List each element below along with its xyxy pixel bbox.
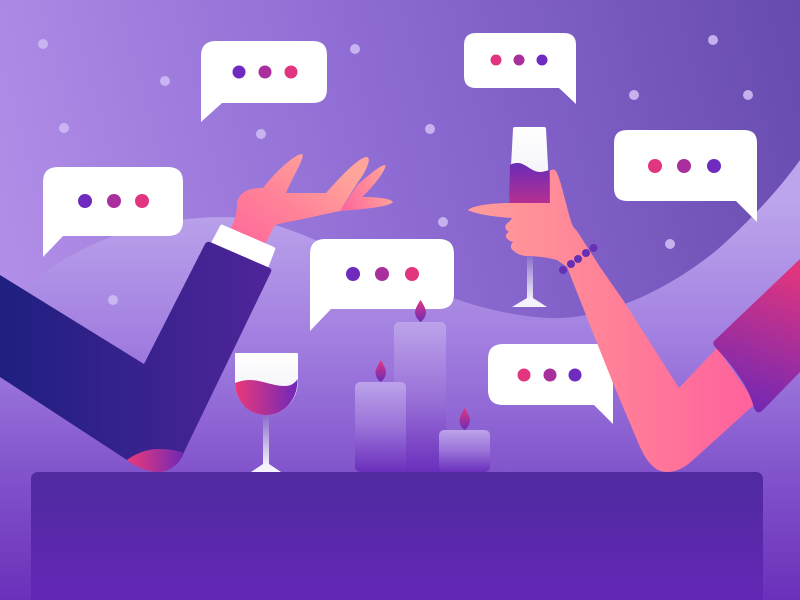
champagne flute (509, 127, 550, 307)
speech bubble: right (614, 130, 757, 222)
background: lower wave (0, 160, 800, 600)
snow dots (38, 35, 753, 305)
arm shape with hand (468, 170, 756, 472)
speech bubble: left (43, 167, 183, 257)
candle: left (355, 360, 406, 472)
elbow lining (127, 449, 184, 472)
sleeve (713, 259, 800, 412)
bracelet (559, 244, 598, 274)
sleeve: suit (0, 242, 271, 471)
candle: short (439, 408, 490, 472)
arm: woman (468, 170, 800, 472)
candle: tall (394, 300, 446, 472)
table (31, 472, 763, 600)
arm: man in suit (0, 154, 393, 472)
speech bubble: top center (464, 33, 576, 104)
speech bubble: center (310, 239, 454, 331)
speech bubble: top left (201, 41, 327, 122)
hand: man (231, 154, 393, 250)
wine glass: table (235, 353, 298, 472)
speech bubble: lower right (488, 344, 613, 424)
cuff (211, 225, 275, 268)
